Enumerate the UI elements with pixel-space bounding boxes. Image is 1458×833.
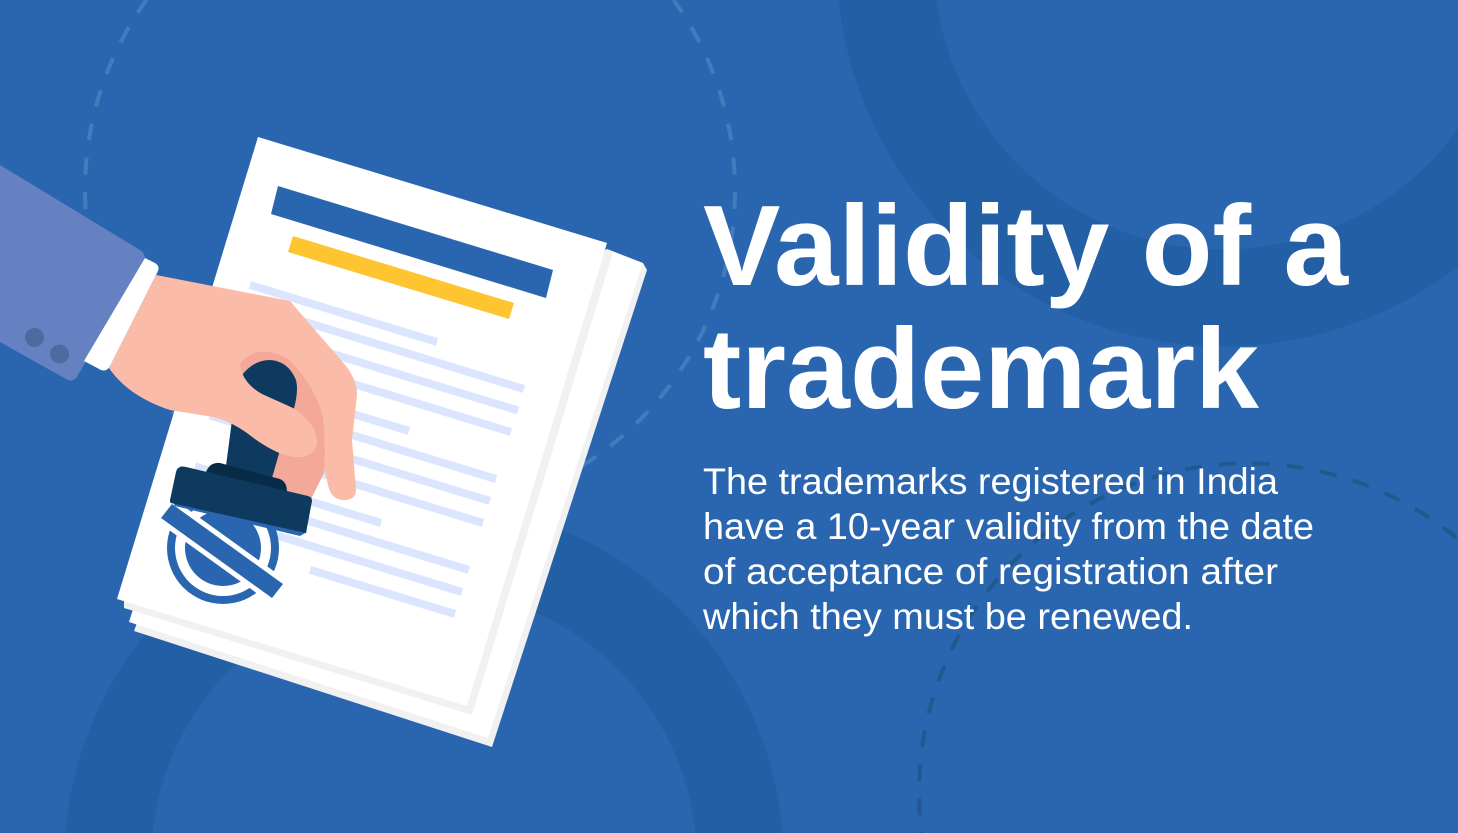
body text: which they must be renewed. — [702, 596, 1193, 637]
title: trademark — [703, 306, 1260, 433]
stamp handle — [226, 360, 297, 478]
dashed circle: bottom right — [919, 463, 1458, 833]
palm and thumb — [109, 275, 317, 457]
back sheet — [129, 249, 647, 747]
stamp collar — [206, 463, 287, 492]
cuff — [84, 258, 159, 370]
dashed circle: top left — [85, 0, 735, 515]
back of hand and index finger — [150, 275, 357, 500]
background ring: bottom centre — [65, 502, 783, 833]
body text: of acceptance of registration after — [703, 551, 1278, 592]
stamp base — [170, 466, 312, 533]
shaded middle finger — [240, 352, 325, 505]
heading bar — [271, 186, 553, 298]
document stack — [117, 137, 647, 747]
sleeve buttons — [25, 328, 69, 364]
sleeve — [0, 165, 159, 380]
top sheet — [117, 137, 607, 706]
stamp imprint — [158, 492, 286, 604]
body text: have a 10-year validity from the date — [703, 506, 1314, 547]
yellow sub-heading bar — [288, 236, 514, 319]
body text: The trademarks registered in India — [703, 461, 1278, 502]
stamp base shadow — [172, 501, 307, 536]
title — [703, 183, 1350, 433]
title: Validity of a — [703, 183, 1350, 310]
body text — [702, 461, 1314, 637]
middle sheet shadow — [124, 145, 613, 715]
text lines — [184, 285, 524, 614]
hand and stamp — [109, 275, 357, 536]
background ring: top right — [839, 0, 1458, 346]
